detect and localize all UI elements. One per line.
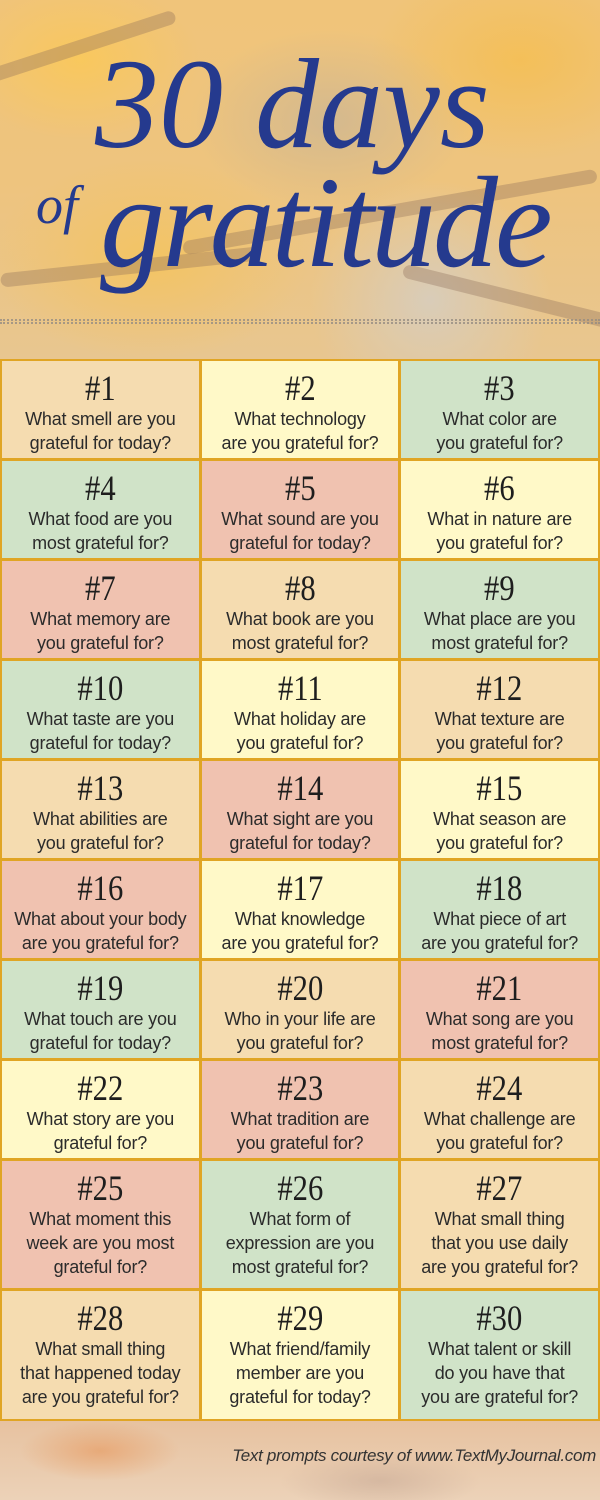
cell 29: member are you [236,1363,364,1383]
cell 28: that happened today [20,1363,180,1383]
cell 25: grateful for? [54,1257,147,1277]
cell 3: What color are [443,409,557,429]
cell 17: #17 [277,868,323,908]
grid of prompts [0,359,600,1421]
cell 16: #16 [77,868,123,908]
cell 19: #19 [77,968,123,1008]
cell 4 [2,461,199,558]
cell 5 [202,461,398,558]
cell 18: What piece of art [433,909,566,929]
cell 7 [2,561,199,658]
cell 15: What season are [433,809,566,829]
cell 1 [2,361,199,458]
cell 11: What holiday are [234,709,366,729]
cell 19: grateful for today? [30,1033,171,1053]
cell 1: #1 [85,368,116,408]
cell 21: most grateful for? [431,1033,568,1053]
cell 13 [2,761,199,858]
cell 25 [2,1161,199,1288]
cell 16 [2,861,199,958]
cell 25: #25 [77,1168,123,1208]
cell 9: What place are you [424,609,575,629]
cell 29: #29 [277,1298,323,1338]
cell 4: #4 [85,468,116,508]
credit text: Text prompts courtesy of www.TextMyJournal.com [232,1446,596,1465]
cell 10: What taste are you [27,709,174,729]
cell 22: #22 [77,1068,123,1108]
cell 29 [202,1291,398,1419]
cell 27: #27 [477,1168,523,1208]
cell 26: most grateful for? [232,1257,368,1277]
cell 18 [401,861,598,958]
cell 2: #2 [285,368,315,408]
cell 17: What knowledge [235,909,365,929]
cell 13: you grateful for? [37,833,164,853]
cell 6: #6 [484,468,515,508]
title: of: of [36,175,78,235]
cell 11 [202,661,398,758]
cell 7: What memory are [30,609,170,629]
cell 18: #18 [477,868,523,908]
cell 1: grateful for today? [30,433,171,453]
cell 8: What book are you [226,609,374,629]
cell 12: you grateful for? [436,733,563,753]
cell 10 [2,661,199,758]
cell 6: What in nature are [427,509,572,529]
cell 15: #15 [477,768,523,808]
cell 30: What talent or skill [428,1339,571,1359]
cell 25: week are you most [26,1233,174,1253]
cell 27: that you use daily [431,1233,568,1253]
cell 16: are you grateful for? [22,933,179,953]
cell 3 [401,361,598,458]
cell 20: #20 [277,968,323,1008]
cell 24 [401,1061,598,1158]
cell 24: you grateful for? [436,1133,563,1153]
cell 28 [2,1291,199,1419]
cell 22: What story are you [27,1109,174,1129]
cell 3: you grateful for? [436,433,563,453]
cell 4: What food are you [28,509,172,529]
cell 13: #13 [77,768,123,808]
cell 22 [2,1061,199,1158]
cell 15: you grateful for? [436,833,563,853]
cell 5: #5 [285,468,315,508]
cell 27: are you grateful for? [421,1257,578,1277]
cell 17 [202,861,398,958]
cell 20 [202,961,398,1058]
cell 29: grateful for today? [229,1387,371,1407]
cell 21 [401,961,598,1058]
cell 30 [401,1291,598,1419]
cell 28: What small thing [35,1339,165,1359]
cell 12: What texture are [435,709,565,729]
cell 9: #9 [484,568,515,608]
cell 20: Who in your life are [224,1009,376,1029]
cell 28: #28 [77,1298,123,1338]
cell 1: What smell are you [25,409,176,429]
cell 24: #24 [477,1068,523,1108]
cell 6 [401,461,598,558]
cell 27: What small thing [435,1209,565,1229]
cell 30: #30 [477,1298,523,1338]
cell 14: What sight are you [227,809,373,829]
cell 8: most grateful for? [232,633,368,653]
cell 25: What moment this [29,1209,171,1229]
cell 2: What technology [234,409,366,429]
cell 20: you grateful for? [237,1033,363,1053]
cell 9: most grateful for? [431,633,568,653]
cell 12 [401,661,598,758]
cell 26: What form of [250,1209,350,1229]
cell 16: What about your body [14,909,186,929]
cell 30: you are grateful for? [421,1387,578,1407]
cell 14 [202,761,398,858]
cell 5: What sound are you [221,509,379,529]
cell 23 [202,1061,398,1158]
cell 2 [202,361,398,458]
cell 23: What tradition are [231,1109,369,1129]
cell 29: What friend/family [230,1339,370,1359]
cell 18: are you grateful for? [421,933,578,953]
cell 11: you grateful for? [237,733,363,753]
cell 14: grateful for today? [229,833,371,853]
cell 23: #23 [277,1068,323,1108]
cell 2: are you grateful for? [222,433,378,453]
cell 10: grateful for today? [30,733,171,753]
cell 10: #10 [77,668,123,708]
cell 4: most grateful for? [32,533,169,553]
cell 23: you grateful for? [237,1133,363,1153]
header background [0,0,600,361]
cell 19 [2,961,199,1058]
cell 30: do you have that [435,1363,565,1383]
cell 5: grateful for today? [229,533,371,553]
cell 6: you grateful for? [436,533,563,553]
cell 27 [401,1161,598,1288]
cell 7: you grateful for? [37,633,164,653]
cell 24: What challenge are [424,1109,575,1129]
cell 17: are you grateful for? [222,933,378,953]
cell 3: #3 [484,368,515,408]
footer background [0,1421,600,1500]
cell 19: What touch are you [24,1009,177,1029]
cell 14: #14 [277,768,323,808]
cell 8: #8 [285,568,315,608]
title: gratitude: gratitude [100,151,550,295]
cell 26: #26 [277,1168,323,1208]
cell 8 [202,561,398,658]
title: 30 days: 30 days [95,33,490,175]
cell 26 [202,1161,398,1288]
cell 21: #21 [477,968,523,1008]
cell 11: #11 [278,668,322,708]
cell 12: #12 [477,668,523,708]
cell 15 [401,761,598,858]
cell 28: are you grateful for? [22,1387,179,1407]
cell 22: grateful for? [54,1133,147,1153]
cell 26: expression are you [226,1233,374,1253]
cell 13: What abilities are [33,809,168,829]
cell 9 [401,561,598,658]
cell 7: #7 [85,568,116,608]
cell 21: What song are you [426,1009,574,1029]
